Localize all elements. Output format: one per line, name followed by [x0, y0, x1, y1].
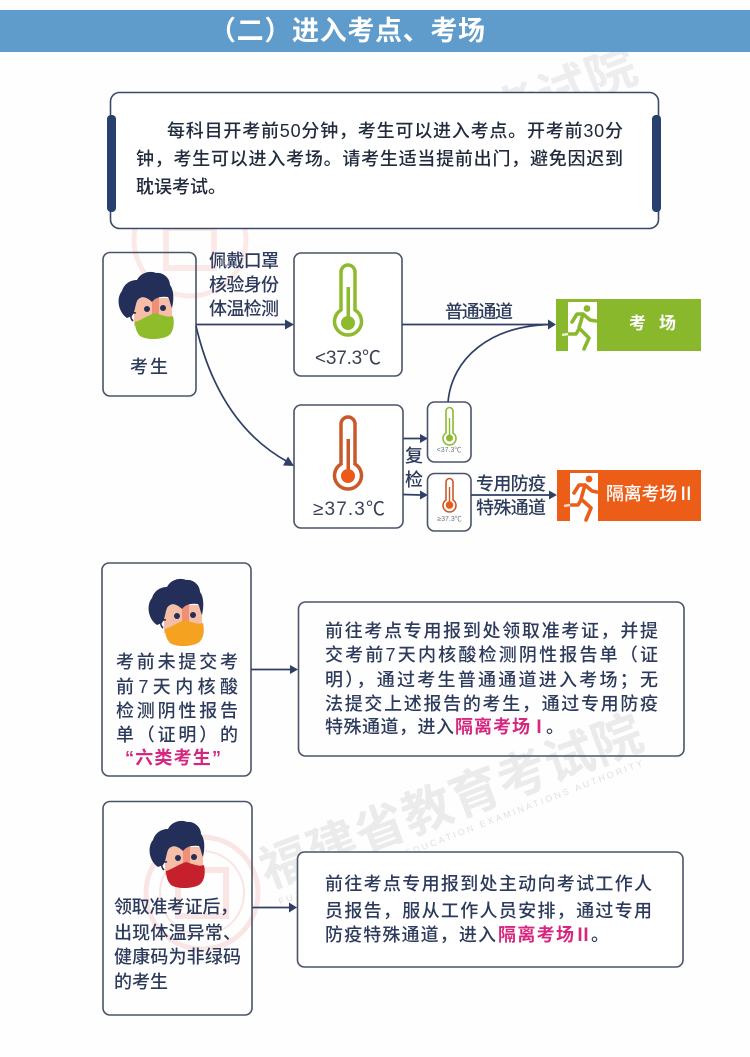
label: check steps: 佩戴口罩 [209, 251, 279, 271]
icon: orange runner [571, 476, 597, 520]
panel: recheck normal [428, 402, 471, 462]
panel: abnormal examinee: 出现体温异常、 [114, 923, 241, 943]
label: special channel: 专用防疫 [476, 474, 546, 494]
rear leg beyond panel [562, 334, 568, 335]
exit sign: exam room [556, 299, 701, 351]
watermark: main text: 福建省教育考试院 [252, 705, 650, 899]
panel: six categories instruction: 法提交上述报告的考生，通过专用防疫 [325, 694, 658, 714]
panel: six categories examinee: 考前未提交考 [116, 652, 238, 672]
panel: six categories instruction: 前往考点专用报到处领取准考证，并提 [325, 621, 658, 641]
title banner: （二）进入考点、考场 [209, 16, 485, 46]
panel: recheck normal: <37.3℃ [437, 446, 461, 454]
panel: abnormal instruction [298, 852, 683, 967]
watermark: upper text: 考试院 [482, 38, 644, 144]
label: recheck: 复 [405, 446, 423, 466]
icon: small orange thermometer [443, 479, 456, 512]
arrow: examinee to high temperature [196, 326, 294, 466]
notice panel [107, 92, 661, 228]
panel: six categories instruction: 交考前7天内核酸检测阴性报告单（证 [325, 644, 658, 665]
panel: abnormal instruction: 员报告，服从工作人员安排，通过专用 [325, 901, 652, 921]
rear leg beyond panel [564, 505, 570, 506]
icon: green runner [569, 305, 596, 349]
panel: six categories instruction: 特殊通道，进入 [325, 717, 454, 737]
panel: six categories instruction: Ⅰ [530, 717, 548, 737]
panel: abnormal examinee [103, 802, 252, 1015]
panel: abnormal examinee: 领取准考证后， [114, 897, 238, 917]
panel: six categories examinee: “六类考生” [125, 748, 221, 768]
panel: six categories instruction: 。 [546, 717, 564, 737]
notice panel: 耽误考试。 [136, 177, 226, 197]
panel: abnormal instruction: 。 [591, 925, 609, 945]
panel: abnormal instruction: Ⅱ [574, 925, 592, 945]
label: recheck: 检 [405, 469, 423, 490]
panel: normal temperature [294, 253, 402, 376]
panel: recheck high [428, 474, 471, 531]
panel: recheck high: ≥37.3℃ [437, 515, 462, 523]
panel: abnormal instruction: 防疫特殊通道，进入 [325, 925, 496, 945]
watermark: lower seal [146, 837, 258, 949]
icon: orange thermometer [334, 417, 361, 489]
icon: small green thermometer [443, 408, 456, 445]
panel: abnormal examinee: 健康码为非绿码 [114, 947, 241, 967]
panel: six categories examinee: 前7天内核酸 [116, 677, 238, 697]
panel: six categories instruction: 明），通过考生普通通道进入考场；无 [325, 670, 658, 690]
icon: examinee with orange mask [149, 579, 204, 646]
exit sign: isolation room: 隔离考场Ⅱ [606, 484, 695, 504]
arrow: recheck branches [403, 434, 428, 500]
arrow: abnormal to instruction [252, 902, 297, 912]
notice panel: 钟，考生可以进入考场。请考生适当提前出门，避免因迟到 [136, 149, 623, 169]
arrow: recheck pass to exam room [448, 324, 550, 402]
panel: six categories instruction [298, 602, 684, 756]
icon: green thermometer [334, 265, 362, 335]
arrow: special channel [471, 490, 557, 500]
label: check steps: 体温检测 [209, 298, 279, 319]
panel: six categories examinee: 单（证明）的 [116, 725, 238, 745]
arrow: examinee to normal temperature [196, 320, 294, 330]
label: normal channel: 普通通道 [445, 302, 513, 322]
icon: examinee with green mask [119, 272, 174, 339]
panel: examinee: 考生 [130, 357, 168, 377]
label: special channel: 特殊通道 [476, 498, 546, 518]
panel: six categories examinee: 检测阴性报告 [116, 700, 238, 721]
panel: abnormal examinee: 的考生 [114, 972, 168, 992]
exit sign: exam room: 考 场 [629, 314, 676, 333]
panel: abnormal instruction: 前往考点专用报到处主动向考试工作人 [325, 874, 652, 894]
panel: high temperature [294, 405, 403, 528]
watermark: english line: FUJIAN PROVINCIAL EDUCATION EXAMINATIONS AUTHORITY [277, 758, 644, 907]
panel: examinee [103, 252, 196, 396]
label: special channel [476, 474, 546, 518]
icon: examinee with red mask [150, 821, 205, 888]
arrow: normal channel [402, 320, 556, 330]
watermark: upper seal [134, 184, 246, 296]
panel: six categories examinee [102, 563, 251, 776]
label: check steps: 核验身份 [209, 275, 279, 295]
label: check steps [209, 251, 279, 319]
label: recheck [405, 446, 423, 490]
exit sign: isolation room [557, 470, 701, 521]
panel: normal temperature: <37.3℃ [315, 348, 381, 369]
panel: six categories instruction: 隔离考场 [455, 716, 530, 737]
panel: abnormal instruction: 隔离考场 [498, 924, 574, 945]
panel: high temperature: ≥37.3℃ [313, 499, 385, 520]
arrow: six categories to instruction [251, 665, 298, 674]
notice panel: 每科目开考前50分钟，考生可以进入考点。开考前30分 [167, 121, 623, 141]
title banner [0, 10, 750, 52]
